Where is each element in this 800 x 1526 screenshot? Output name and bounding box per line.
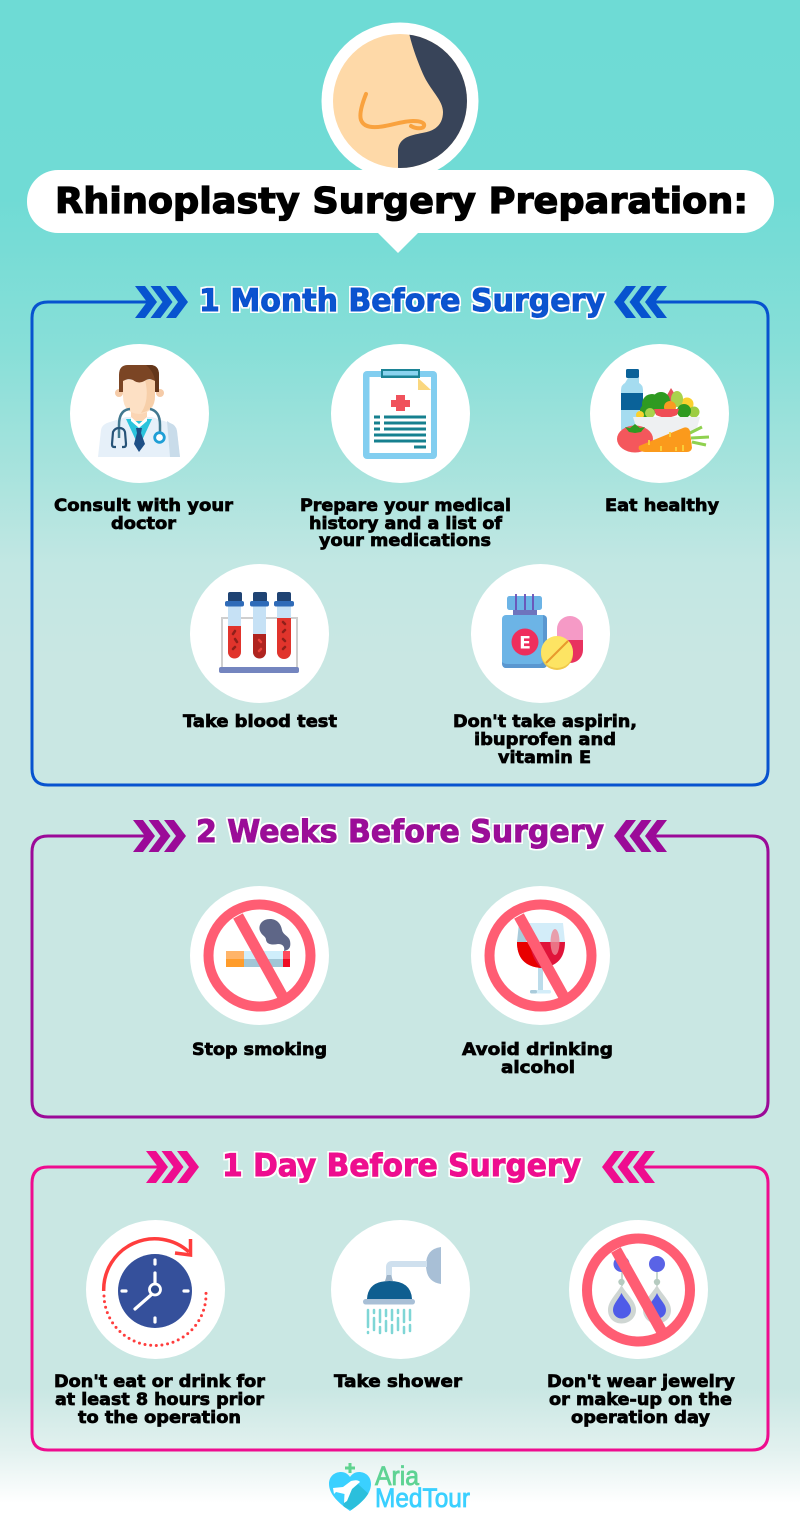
icon: test tubes <box>219 592 299 673</box>
logo: Aria MedTour <box>329 1461 470 1513</box>
item: don't eat or drink <box>54 1220 266 1428</box>
item: prepare medical history: Prepare your medical <box>300 496 511 516</box>
heading: 2 weeks before surgery: 2 Weeks Before Surgery <box>196 814 604 850</box>
item: don't wear jewelry <box>547 1220 735 1428</box>
title banner: Rhinoplasty Surgery Preparation: <box>55 181 748 222</box>
item: consult with your doctor: Consult with your <box>54 496 234 516</box>
item: avoid drinking alcohol: alcohol <box>501 1058 575 1078</box>
icon: healthy food <box>617 369 709 452</box>
icon: clock <box>104 1239 206 1345</box>
heading: 1 month before surgery: 1 Month Before Surgery <box>199 283 605 319</box>
panel: 2 weeks before surgery <box>32 814 768 1117</box>
item: consult with your doctor: doctor <box>111 514 177 534</box>
item: don't wear jewelry: operation day <box>571 1408 710 1428</box>
icon: pills and bottle <box>502 594 583 670</box>
icon: nose in circle <box>322 22 478 180</box>
item: don't take aspirin <box>453 564 637 768</box>
item: take blood test: Take blood test <box>183 712 337 732</box>
item: prepare medical history: history and a list of <box>309 514 503 534</box>
panel: 1 day before surgery <box>32 1148 768 1450</box>
title banner <box>27 170 774 253</box>
item: don't eat or drink: to the operation <box>78 1408 241 1428</box>
item: stop smoking: Stop smoking <box>192 1040 327 1060</box>
item: eat healthy: Eat healthy <box>605 496 719 516</box>
item: consult with your doctor <box>54 344 234 534</box>
item: prepare medical history <box>300 344 511 551</box>
item: don't wear jewelry: or make-up on the <box>549 1390 732 1410</box>
item: stop smoking <box>190 886 329 1060</box>
item: avoid drinking alcohol: Avoid drinking <box>462 1040 613 1060</box>
logo: Aria MedTour: MedTour <box>375 1483 470 1513</box>
item: take shower <box>331 1220 470 1392</box>
item: eat healthy <box>590 344 729 516</box>
icon: clipboard <box>363 369 437 459</box>
panel: 1 month before surgery <box>32 283 768 785</box>
item: don't take aspirin: ibuprofen and <box>474 730 616 750</box>
item: don't take aspirin: vitamin E <box>498 748 591 768</box>
item: prepare medical history: your medications <box>319 531 491 551</box>
logo: Aria MedTour: Aria <box>375 1461 420 1491</box>
item: don't wear jewelry: Don't wear jewelry <box>547 1372 735 1392</box>
item: don't eat or drink: at least 8 hours prior <box>55 1390 265 1410</box>
item: take blood test <box>183 564 337 732</box>
icon: pills and bottle: E <box>519 634 531 654</box>
heading: 1 day before surgery: 1 Day Before Surgery <box>222 1148 581 1184</box>
item: don't eat or drink: Don't eat or drink for <box>54 1372 266 1392</box>
icon: no alcohol <box>490 904 592 1006</box>
item: don't take aspirin: Don't take aspirin, <box>453 712 637 732</box>
item: take shower: Take shower <box>334 1372 463 1392</box>
icon: no smoking <box>208 904 310 1006</box>
icon: no jewelry <box>587 1238 690 1342</box>
icon: doctor <box>98 365 180 457</box>
item: avoid drinking alcohol <box>462 886 613 1078</box>
icon: shower <box>363 1247 441 1333</box>
